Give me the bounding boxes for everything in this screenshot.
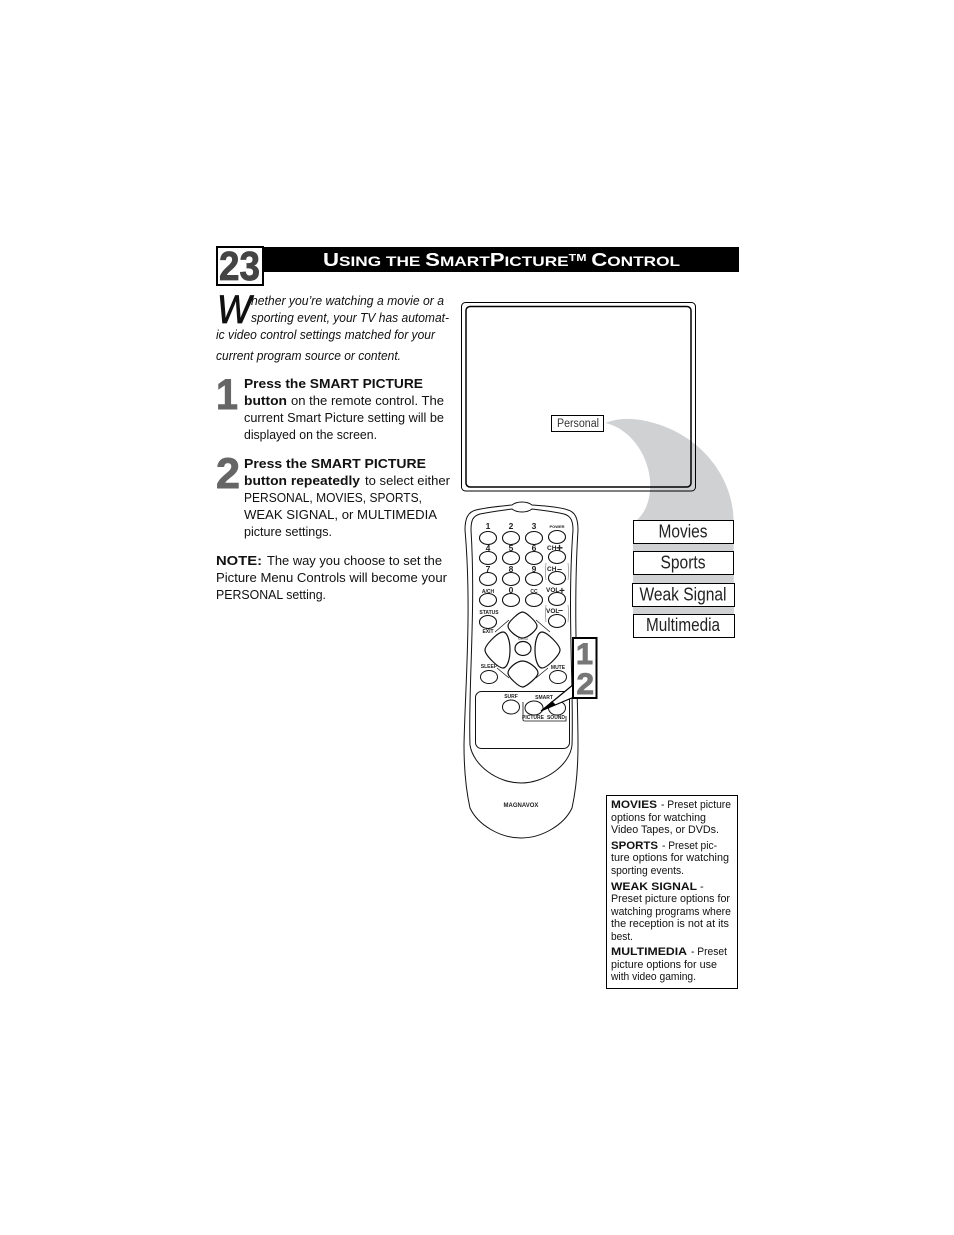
number and channel buttons [480,530,568,628]
remote button labels: MAGNAVOX [504,803,538,809]
option: Sports: Sports [660,552,706,572]
definitions box: best. [611,931,633,943]
smart buttons panel [476,692,570,748]
definitions box: with video gaming. [610,971,696,983]
remote button labels [479,521,566,809]
definitions box: MULTIMEDIA [611,946,687,958]
definitions box: ture options for watching [611,852,729,864]
definitions box: SPORTS [611,840,658,852]
remote button labels: 5 [509,543,514,553]
remote button labels: CC [530,589,538,595]
intro paragraph: sporting event, your TV has automat- [251,310,450,325]
definitions box: Video Tapes, or DVDs. [611,824,719,836]
option: Movies: Movies [658,522,708,542]
remote button labels: – [558,605,563,615]
remote button labels: CH [547,545,557,552]
definitions box [606,796,738,988]
remote button labels: SOUND [547,715,565,721]
remote button labels: 9 [532,564,537,574]
step 2: to select either [365,473,451,488]
definitions box: - Preset [691,946,727,958]
remote button labels: 0 [509,585,514,595]
definitions box: picture options for use [611,959,717,971]
callout steps 1 2 pointing at Smart Picture button [541,638,596,711]
note [216,553,448,602]
remote button labels: SMART [535,695,553,701]
option: Multimedia: Multimedia [646,615,721,635]
definitions box: - [700,881,704,893]
step 1: on the remote control. The [291,393,444,408]
note: PERSONAL setting. [216,587,326,602]
step 1: Press the SMART PICTURE [244,376,423,391]
step 1: current Smart Picture setting will be [244,410,444,425]
intro paragraph: ic video control settings matched for your [216,327,436,342]
gray swoosh connecting Personal to the options [605,419,734,637]
step 2: PERSONAL, MOVIES, SPORTS, [244,490,422,505]
intro paragraph [216,288,450,363]
Personal label: Personal [557,418,599,430]
step 2: WEAK SIGNAL, or MULTIMEDIA [244,507,437,522]
remote control [464,502,578,838]
definitions box: Preset picture options for [611,893,730,905]
remote button labels: SLEEP [481,664,498,670]
TV screen [462,302,696,491]
remote button labels: POWER [549,524,565,529]
remote button labels: CH [547,566,557,573]
step 1 [216,371,444,442]
navigation pad [485,612,560,687]
remote button labels: STATUS [479,610,499,616]
remote button labels: VOL [546,608,559,615]
Personal label [552,416,604,432]
definitions box: MOVIES [611,799,657,811]
remote body outline [464,502,578,838]
step 1: 1 [216,371,238,419]
note: NOTE: [216,553,262,568]
remote button labels: + [556,541,563,555]
note: Picture Menu Controls will become your [216,570,448,585]
remote inner outline [470,509,573,783]
option: Movies [634,520,734,544]
title bar: CONTROL [591,250,666,270]
step 2 [216,450,451,539]
callout steps 1 2 pointing at Smart Picture button: 1 [576,638,593,671]
title bar [263,247,739,272]
remote button labels: 7 [486,564,491,574]
intro paragraph: W [217,288,254,332]
step 2: 2 [216,450,240,498]
remote button labels: 4 [486,543,491,553]
definitions box: WEAK SIGNAL [611,881,697,893]
remote button labels: 3 [532,521,537,531]
sleep and mute buttons [480,670,498,684]
remote button labels: 8 [509,564,514,574]
remote button labels: MUTE [551,665,566,671]
definitions box: sporting events. [611,865,684,877]
remote button labels: PICTURE [522,715,545,721]
definitions box: options for watching [611,812,706,824]
note: The way you choose to set the [267,553,442,568]
remote button labels: 6 [532,543,537,553]
remote button labels: 1 [486,521,491,531]
remote button labels: 2 [509,521,514,531]
step 2: picture settings. [244,524,332,539]
definitions box: - Preset pic- [662,840,717,852]
intro paragraph: hether you’re watching a movie or a [251,293,444,308]
title bar: USING THE SMART PICTURE [323,250,557,270]
remote button labels: A/CH [482,589,494,595]
option: Weak Signal: Weak Signal [640,584,726,604]
step 1: displayed on the screen. [244,427,377,442]
remote button labels: MENU [518,637,529,641]
step 1: button [244,393,287,408]
remote button labels: SURF [504,694,518,700]
title bar: TM [569,253,586,264]
remote button labels: – [557,564,562,574]
page number badge: 23 [219,243,260,289]
definitions box: watching programs where [610,906,731,918]
callout steps 1 2 pointing at Smart Picture button: 2 [576,668,594,701]
remote button labels: + [559,586,565,597]
step 2: button repeatedly [244,473,361,488]
definitions box: the reception is not at its [611,918,729,930]
intro paragraph: current program source or content. [216,348,401,363]
definitions box: - Preset picture [661,799,731,811]
option: Sports [634,552,734,574]
remote button labels: VOL [546,587,559,594]
step 2: Press the SMART PICTURE [244,456,426,471]
remote button labels: EXIT [482,629,494,635]
